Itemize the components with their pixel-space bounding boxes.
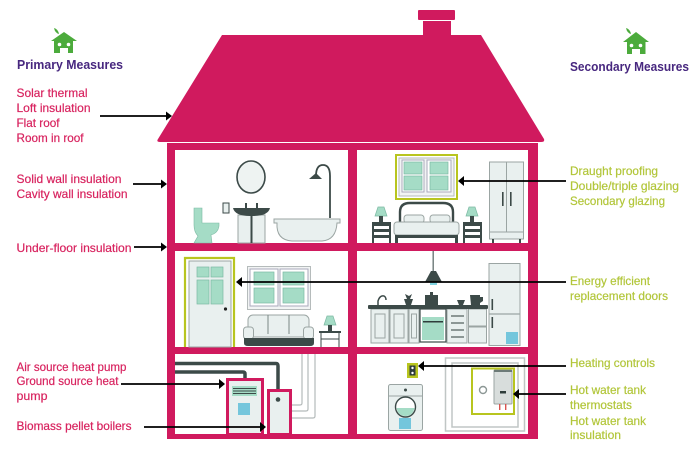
washing machine xyxy=(388,384,422,430)
vanity cabinet xyxy=(238,215,265,243)
room: bedroom xyxy=(357,150,528,243)
grey pipes xyxy=(292,354,315,418)
arrow: walls xyxy=(133,180,167,188)
jug xyxy=(470,295,483,305)
secondary list: draught and glazing: Draught proofing xyxy=(570,164,658,178)
cup xyxy=(457,300,465,305)
plant pot xyxy=(404,294,413,305)
secondary list: doors xyxy=(570,274,668,303)
room: kitchen xyxy=(357,251,528,347)
arrow: heat pump xyxy=(121,379,225,389)
secondary list: doors: Energy efficient xyxy=(570,274,651,288)
left nightstand and lamp xyxy=(372,207,391,243)
shower xyxy=(316,165,330,218)
wardrobe xyxy=(490,162,524,243)
hot water tank with highlight xyxy=(472,368,514,414)
icon: primary measures house xyxy=(51,28,77,53)
secondary list: draught and glazing: Secondary glazing xyxy=(570,194,665,208)
double oven xyxy=(468,309,486,343)
room: plant room xyxy=(175,354,348,434)
arrow: roof xyxy=(100,112,172,120)
primary list: roof: Room in roof xyxy=(16,131,84,145)
bathroom furniture xyxy=(194,161,340,243)
primary list: heat pumps: Air source heat pump xyxy=(16,360,127,374)
boiler unit xyxy=(268,390,290,434)
heading: secondary measures: Secondary Measures xyxy=(570,60,689,74)
bath xyxy=(274,219,340,241)
primary list: roof: Flat roof xyxy=(16,116,60,130)
right nightstand and lamp xyxy=(463,207,482,243)
arrow: hot water tank xyxy=(513,389,566,399)
heating control with highlight xyxy=(407,363,418,378)
light switch xyxy=(223,203,229,213)
primary list: roof xyxy=(16,86,90,145)
secondary list: hot water: Hot water tank xyxy=(570,383,647,397)
pendant light xyxy=(425,251,442,285)
chimney cap xyxy=(418,10,455,20)
drawers xyxy=(447,309,467,343)
primary list: walls: Cavity wall insulation xyxy=(16,187,128,201)
arrow: glazing xyxy=(458,176,566,186)
primary list: heat pumps xyxy=(16,360,127,403)
window with glazing highlight xyxy=(396,155,457,199)
icon: secondary measures house xyxy=(623,28,649,54)
sink xyxy=(233,203,270,243)
door with highlight frame xyxy=(185,258,234,347)
living room furniture xyxy=(185,258,341,347)
primary list: walls: Solid wall insulation xyxy=(16,172,122,186)
worktop xyxy=(368,305,488,309)
arrow: boiler xyxy=(144,422,266,432)
tap xyxy=(378,296,386,305)
window xyxy=(248,266,310,310)
secondary list: draught and glazing xyxy=(570,164,679,208)
primary list: walls xyxy=(16,172,128,201)
primary list: heat pumps: Ground source heat xyxy=(16,374,119,388)
room: living room xyxy=(175,251,348,347)
primary list: floor: Under-floor insulation xyxy=(16,241,132,255)
bed xyxy=(394,203,459,243)
plant room equipment xyxy=(175,354,315,434)
oven xyxy=(420,309,446,342)
primary list: heat pumps: pump xyxy=(16,389,48,403)
secondary list: hot water xyxy=(570,383,647,442)
heading: primary measures: Primary Measures xyxy=(17,58,123,72)
dark pipes xyxy=(175,364,278,390)
sofa xyxy=(244,315,314,346)
secondary list: draught and glazing: Double/triple glazing xyxy=(570,179,679,193)
arrow: doors xyxy=(236,277,566,287)
secondary list: hot water: Hot water tank xyxy=(570,414,647,428)
toilet xyxy=(194,208,219,243)
roof xyxy=(157,21,544,142)
room: bathroom xyxy=(175,150,348,243)
mirror xyxy=(237,161,265,193)
base cabinets xyxy=(371,309,419,343)
saucepan xyxy=(425,292,438,305)
primary list: boilers: Biomass pellet boilers xyxy=(16,419,132,433)
bedroom furniture xyxy=(372,155,524,243)
secondary list: hot water: thermostats xyxy=(570,398,632,412)
utility room equipment xyxy=(388,358,524,431)
shower head xyxy=(309,173,322,179)
secondary list: hot water: insulation xyxy=(570,428,621,442)
kitchen furniture xyxy=(368,251,520,346)
fridge freezer xyxy=(489,264,520,346)
cupboard xyxy=(446,358,524,431)
house xyxy=(157,10,544,439)
primary list: roof: Solar thermal xyxy=(16,86,88,100)
arrow: floor xyxy=(134,242,167,252)
secondary list: doors: replacement doors xyxy=(570,289,668,303)
house walls xyxy=(167,143,538,439)
heat pump unit xyxy=(228,380,262,434)
secondary list: heating controls: Heating controls xyxy=(570,356,655,370)
arrow: heating controls xyxy=(418,361,566,371)
primary list: roof: Loft insulation xyxy=(16,101,90,115)
side table and lamp xyxy=(319,316,341,347)
room: utility room xyxy=(357,354,528,434)
